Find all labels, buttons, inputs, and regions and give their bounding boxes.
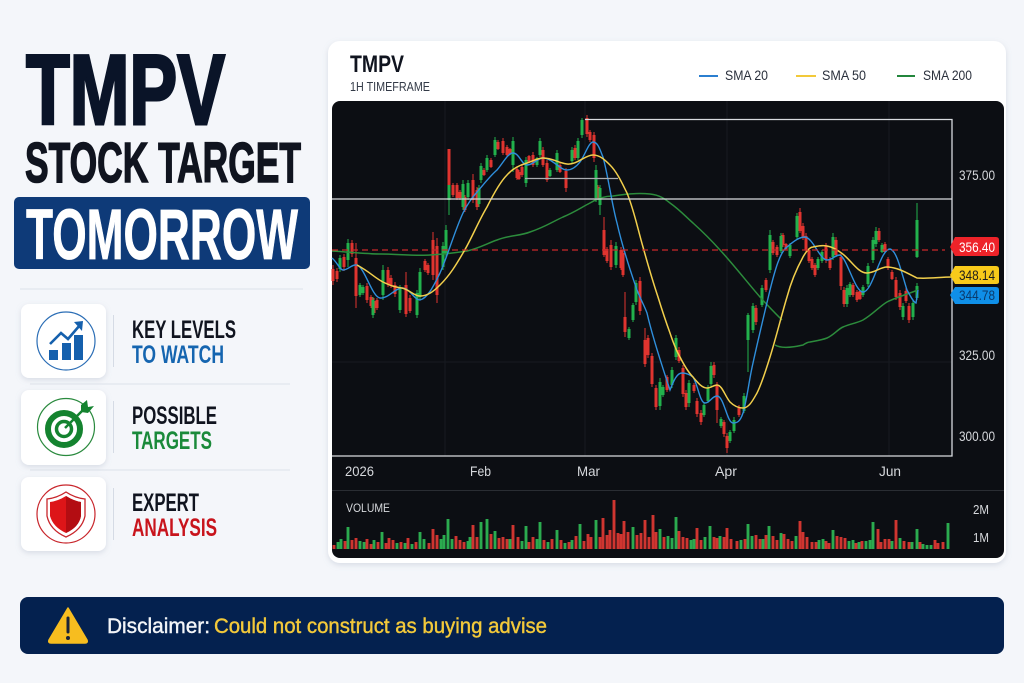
legend [699,67,972,83]
feature: expert analysis [21,477,217,551]
price axis labels: 300.00 [959,428,995,444]
volume label: VOLUME [346,501,390,515]
time axis labels: Apr [715,463,737,479]
disclaimer text: Disclaimer: [107,615,210,638]
title: TMPV: TMPV [26,34,225,145]
panel: dark chart background [332,101,1004,558]
price tag 344.78: 344.78 [959,287,995,303]
icon: target with arrow [38,398,94,456]
feature: key levels to watch: TO WATCH [132,341,224,369]
feature: possible targets: TARGETS [132,427,212,455]
legend: SMA 200 [923,67,972,83]
banner: tomorrow: TOMORROW [26,196,298,275]
price tag 356.40: 356.40 [959,239,995,255]
disclaimer text: Could not construct as buying advise [214,615,547,638]
feature: expert analysis: EXPERT [132,489,199,517]
feature: possible targets [21,390,217,465]
line: SMA 20 [332,142,918,423]
feature: key levels to watch [21,304,236,378]
price axis labels: 325.00 [959,347,995,363]
candlesticks [333,115,917,453]
volume axis labels: 1M [973,530,989,545]
subtitle: stock target: STOCK TARGET [25,131,301,195]
banner: tomorrow [14,196,310,275]
time axis labels: Jun [879,463,901,479]
icon: shield [37,485,95,543]
time axis labels: Feb [470,463,491,479]
feature: possible targets: POSSIBLE [132,402,217,430]
annotation lines [332,120,952,456]
time axis labels: Mar [577,463,600,479]
price tag 348.14 [950,266,999,284]
price tag 348.14: 348.14 [959,267,995,283]
price axis labels: 375.00 [959,167,995,183]
price axis labels [959,167,995,444]
disclaimer bar [20,597,1004,654]
feature: expert analysis: ANALYSIS [132,514,217,542]
time axis labels [345,463,901,479]
volume bars [334,500,948,549]
chart timeframe: 1H TIMEFRAME [350,79,430,94]
icon: warning triangle [49,608,87,643]
panel: chart card [328,41,1006,563]
feature: key levels to watch: KEY LEVELS [132,316,236,344]
time axis labels: 2026 [345,463,374,479]
line: SMA 50 [357,155,952,408]
icon: rising bar chart [37,312,95,370]
legend: SMA 50 [822,67,866,83]
price tag 356.40 [950,237,999,256]
volume axis labels [973,502,989,545]
volume axis labels: 2M [973,502,989,517]
chart header title: TMPV [350,51,404,78]
legend: SMA 20 [725,67,768,83]
line: SMA 200 [332,194,782,320]
